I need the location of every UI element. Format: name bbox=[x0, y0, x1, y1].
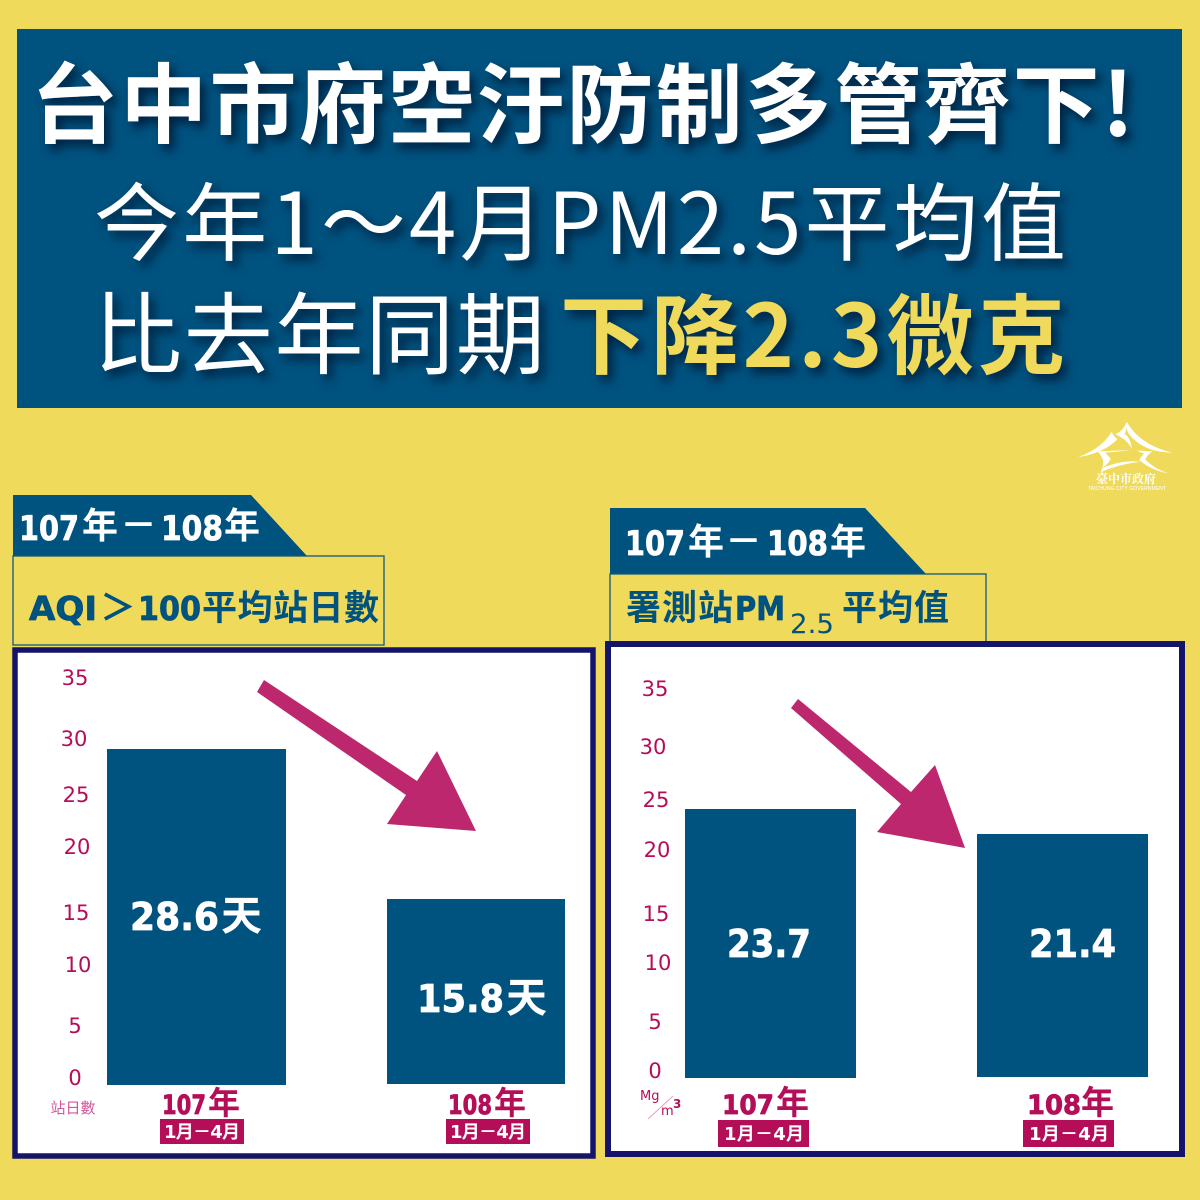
label 108: 1月－4月 bbox=[450, 1122, 526, 1143]
title line 1: 台中市府空汙防制多管齊下! bbox=[31, 36, 1134, 162]
label 108 bbox=[446, 1078, 530, 1144]
highlight: decrease 2.3 micrograms: 下降2.3微克 bbox=[560, 267, 1065, 393]
label 107 bbox=[718, 1076, 809, 1147]
label 108: 年 bbox=[1081, 1076, 1114, 1124]
right unit label: 3 bbox=[673, 1097, 681, 1111]
label 107 bbox=[160, 1078, 244, 1144]
bar 107 bbox=[685, 809, 856, 1078]
right tab bbox=[610, 508, 926, 574]
left y axis: 30 bbox=[61, 727, 87, 751]
label 107: 年 bbox=[776, 1076, 809, 1124]
label 108: 108 bbox=[448, 1090, 492, 1121]
right subtitle: PM bbox=[735, 589, 785, 628]
label 107: 1月－4月 bbox=[724, 1124, 804, 1145]
left y axis: 15 bbox=[63, 901, 89, 925]
left y axis: 20 bbox=[64, 835, 90, 859]
left tab bbox=[13, 495, 307, 556]
bar 108: 15.8 bbox=[417, 977, 504, 1021]
right y axis: 15 bbox=[643, 902, 669, 926]
panel: PM2.5 chart bbox=[608, 508, 1182, 1154]
right tab: － bbox=[725, 511, 762, 565]
left y axis bbox=[61, 666, 91, 1090]
arrow: decrease bbox=[257, 680, 476, 831]
icon: Taichung City Government logo bbox=[1078, 422, 1172, 492]
left subtitle: ＞ bbox=[100, 579, 136, 631]
left tab: － bbox=[120, 495, 157, 549]
right subtitle: 平均值 bbox=[842, 580, 949, 631]
left subtitle: 100 bbox=[138, 589, 201, 628]
right chart frame bbox=[608, 644, 1182, 1154]
right y axis: 20 bbox=[644, 838, 670, 862]
left tab: 年 bbox=[82, 497, 118, 549]
left tab: 107 bbox=[19, 509, 79, 549]
bar 108: 天 bbox=[506, 964, 547, 1024]
label 108 bbox=[1023, 1076, 1114, 1147]
label 108: 年 bbox=[494, 1078, 526, 1124]
right y axis: 25 bbox=[643, 788, 669, 812]
left y axis: 35 bbox=[62, 666, 88, 690]
right unit label bbox=[640, 1089, 681, 1119]
left y axis: 5 bbox=[68, 1014, 82, 1038]
right tab: 108 bbox=[767, 524, 828, 564]
right y axis: 5 bbox=[648, 1010, 662, 1034]
logo english name: TAICHUNG CITY GOVERNMENT bbox=[1088, 486, 1166, 492]
bar 108: 21.4 bbox=[1029, 922, 1116, 966]
left subtitle bbox=[13, 556, 384, 645]
bar 107: 天 bbox=[221, 882, 262, 942]
label 107: 1月－4月 bbox=[164, 1122, 240, 1143]
label 107: 107 bbox=[162, 1090, 206, 1121]
left y axis: 0 bbox=[68, 1066, 82, 1090]
right y axis bbox=[640, 677, 671, 1083]
title line 3: 比去年同期 bbox=[93, 264, 545, 393]
right tab: 107 bbox=[625, 524, 685, 564]
logo name: 臺中市政府 bbox=[1096, 470, 1156, 487]
arrow: decrease bbox=[791, 699, 965, 848]
left tab: 年 bbox=[224, 497, 260, 549]
title line 2: 今年1～4月PM2.5平均值 bbox=[94, 156, 1066, 279]
left subtitle: AQI bbox=[29, 589, 97, 628]
right unit label: Mg bbox=[640, 1089, 659, 1104]
right subtitle: 署測站 bbox=[626, 580, 733, 631]
right subtitle bbox=[610, 574, 986, 646]
bar 108 bbox=[977, 834, 1148, 1077]
right subtitle: 2.5 bbox=[790, 609, 834, 640]
right tab: 年 bbox=[688, 513, 724, 565]
panel: AQI chart bbox=[13, 495, 593, 1156]
bar 107: 23.7 bbox=[727, 922, 811, 966]
right y axis: 35 bbox=[642, 677, 668, 701]
left tab: 108 bbox=[161, 509, 223, 549]
left y axis: 25 bbox=[63, 783, 89, 807]
right y axis: 0 bbox=[648, 1059, 662, 1083]
left subtitle: 平均站日數 bbox=[202, 580, 379, 631]
title banner bbox=[17, 29, 1182, 408]
label 108: 108 bbox=[1027, 1090, 1081, 1121]
bar 108 bbox=[387, 899, 565, 1084]
right tab: 年 bbox=[830, 513, 866, 565]
left chart frame bbox=[15, 650, 593, 1156]
bar 107 bbox=[107, 749, 286, 1085]
left unit label: 站日數 bbox=[50, 1100, 96, 1117]
right y axis: 10 bbox=[645, 951, 671, 975]
label 107: 年 bbox=[208, 1078, 240, 1124]
label 107: 107 bbox=[722, 1090, 774, 1121]
label 108: 1月－4月 bbox=[1029, 1124, 1109, 1145]
left y axis: 10 bbox=[65, 953, 91, 977]
right unit label: m bbox=[661, 1104, 674, 1119]
bar 107: 28.6 bbox=[130, 895, 219, 939]
right y axis: 30 bbox=[640, 735, 666, 759]
